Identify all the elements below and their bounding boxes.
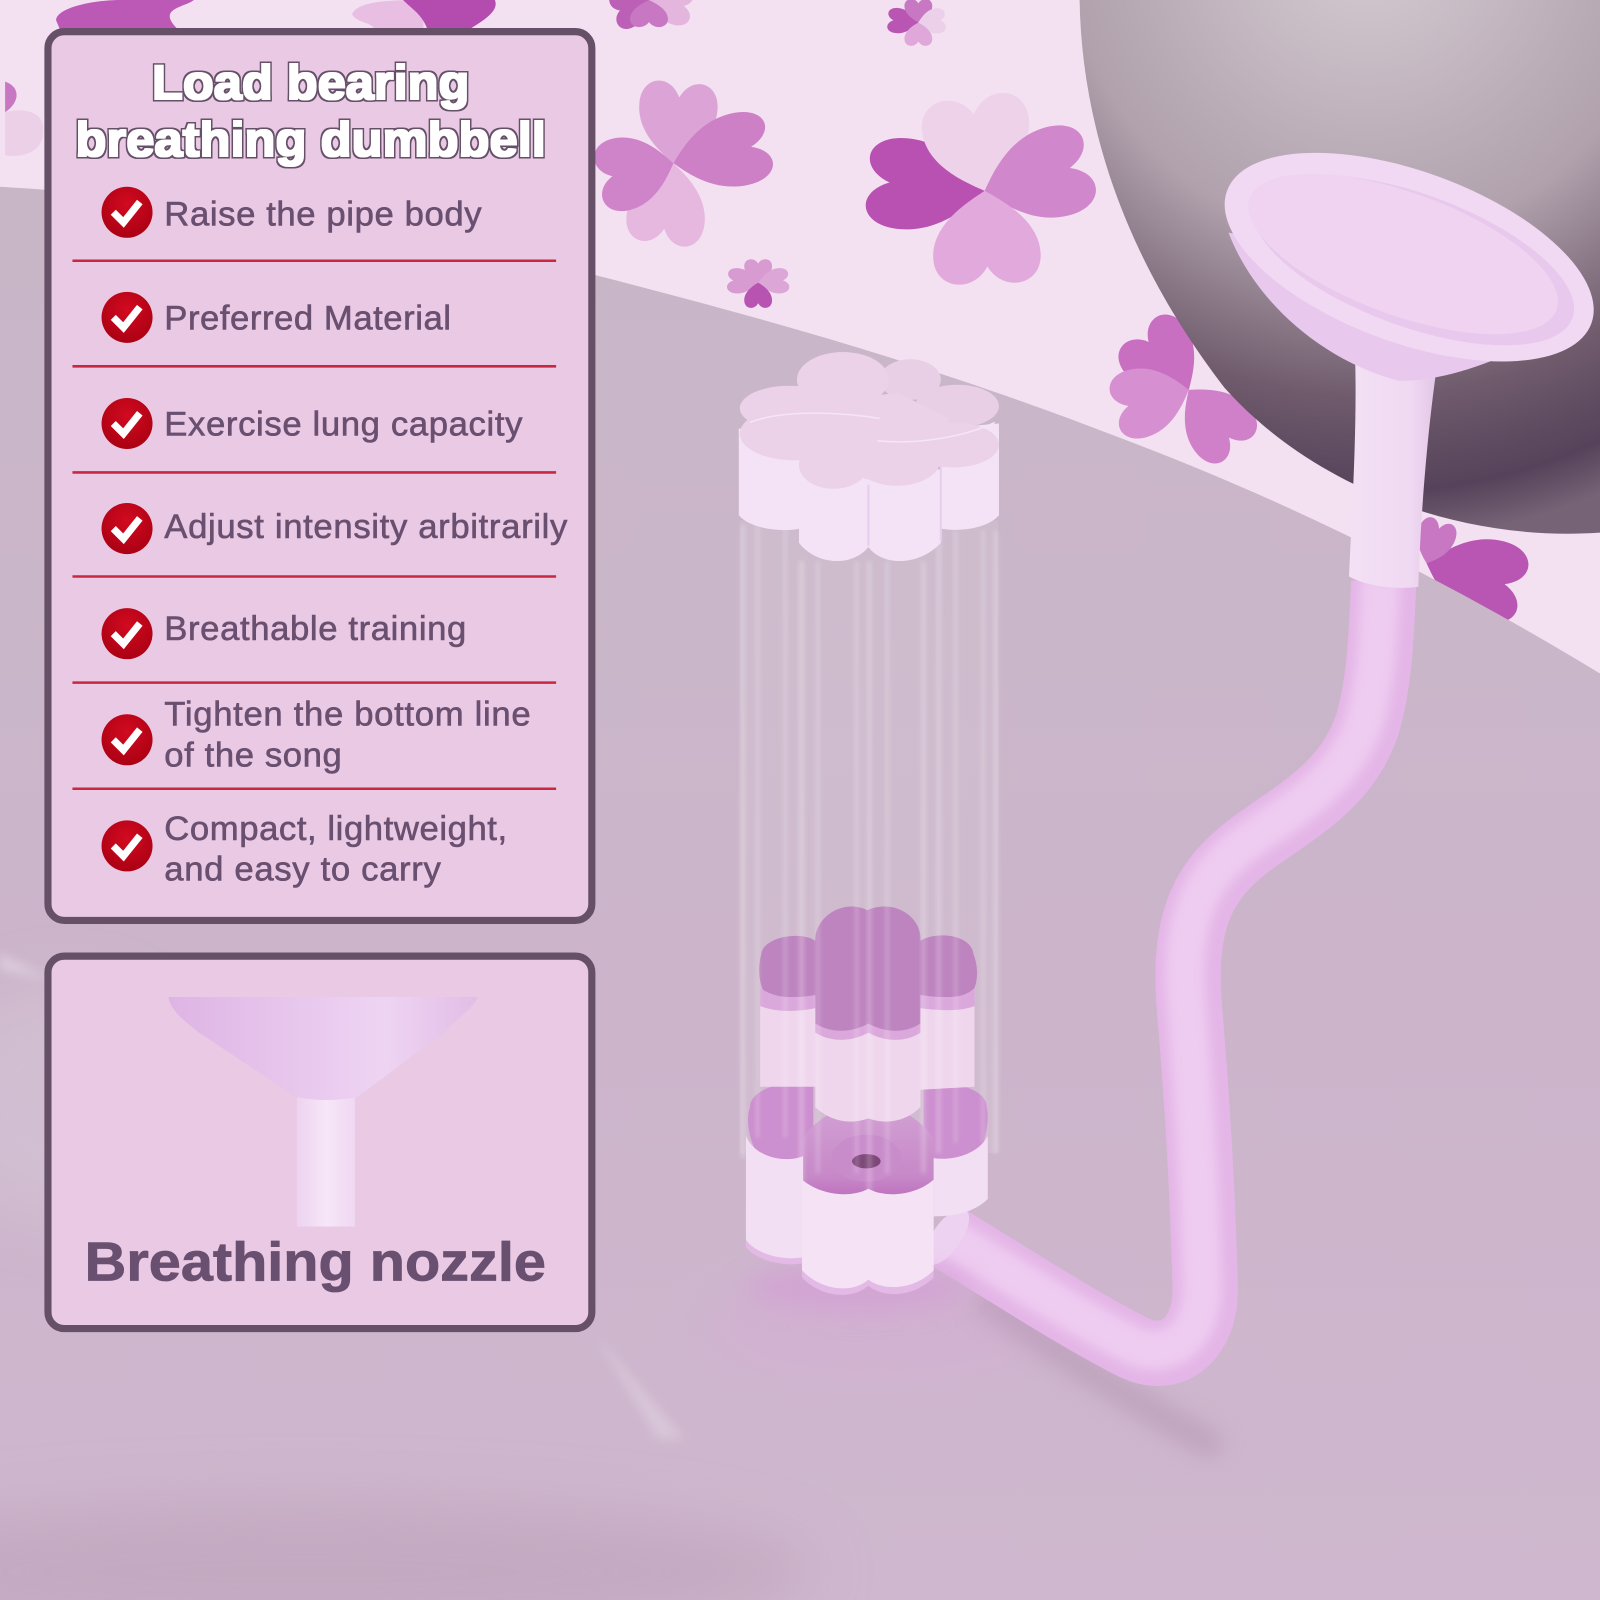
top cap face xyxy=(740,352,999,489)
hose end cap xyxy=(917,1202,977,1272)
clover: small upper xyxy=(887,0,946,46)
funnel bowl xyxy=(1231,140,1595,380)
feature: tighten the bottom line: Tighten the bottom line xyxy=(164,696,531,734)
nozzle neck xyxy=(1349,357,1437,588)
panel frame xyxy=(48,956,592,1329)
feature: compact and lightweight xyxy=(102,810,507,889)
feature: breathable training xyxy=(102,608,466,659)
panel frame xyxy=(48,32,592,920)
feature: preferred material xyxy=(102,292,451,343)
clover: top centre xyxy=(352,0,496,33)
clover wallpaper xyxy=(5,0,1533,629)
feature: compact and lightweight: and easy to carry xyxy=(164,851,441,889)
feature: preferred material: Preferred Material xyxy=(164,300,451,338)
bottom cap base rim xyxy=(746,1240,934,1295)
title xyxy=(76,57,546,167)
title: breathing dumbbell xyxy=(76,114,546,167)
panel: features xyxy=(48,32,592,920)
floor shading xyxy=(0,954,1061,1600)
feature: compact and lightweight: Compact, lightweight, xyxy=(164,810,507,848)
glass body tint xyxy=(740,520,998,1153)
nozzle label: Breathing nozzle xyxy=(85,1231,546,1293)
funnel underside xyxy=(1229,233,1590,381)
lower liquid sides xyxy=(748,1083,988,1159)
lower liquid centre xyxy=(803,1102,934,1209)
bottom cap front xyxy=(802,1180,934,1288)
feature: tighten the bottom line: of the song xyxy=(164,736,342,774)
feature: exercise lung capacity xyxy=(102,398,523,449)
panel: breathing nozzle xyxy=(48,956,592,1329)
nozzle cone xyxy=(168,997,478,1100)
title: Load bearing xyxy=(152,57,469,110)
clover: behind ball xyxy=(1106,307,1265,471)
nozzle stem xyxy=(297,1087,355,1227)
bottom hole xyxy=(832,1135,901,1182)
feature: raise the pipe body: Raise the pipe body xyxy=(164,196,482,234)
glass tube highlights xyxy=(741,526,998,1194)
clover: right edge xyxy=(1409,514,1533,629)
clover: medium xyxy=(591,79,776,249)
top cap sides xyxy=(739,423,999,561)
clover: large xyxy=(864,90,1101,286)
feature: exercise lung capacity: Exercise lung capacity xyxy=(164,406,523,444)
clover: left edge xyxy=(5,82,43,156)
column shadow xyxy=(745,1265,969,1310)
divider lines xyxy=(72,261,556,789)
breathing nozzle and hose xyxy=(917,110,1600,1353)
funnel rim xyxy=(1198,110,1600,404)
piston body xyxy=(760,1006,974,1122)
clover: top left xyxy=(56,0,194,33)
piston rim xyxy=(760,988,974,1040)
top cap lobes edges xyxy=(868,454,941,546)
piston top xyxy=(759,907,977,1033)
feature: adjust intensity: Adjust intensity arbitrarily xyxy=(164,508,568,546)
feature: adjust intensity xyxy=(102,503,568,554)
feature: tighten the bottom line xyxy=(102,696,531,774)
exercise ball xyxy=(1080,0,1600,534)
breathing dumbbell column xyxy=(739,352,999,1310)
bottom cap sides xyxy=(746,1136,988,1258)
clover: top small xyxy=(606,0,695,32)
funnel bowl floor xyxy=(1229,141,1577,367)
hose shadow xyxy=(980,1296,1219,1449)
hose xyxy=(944,579,1384,1353)
feature: raise the pipe body xyxy=(102,187,482,238)
clover: small lower xyxy=(726,259,790,308)
feature: breathable training: Breathable training xyxy=(164,610,466,648)
